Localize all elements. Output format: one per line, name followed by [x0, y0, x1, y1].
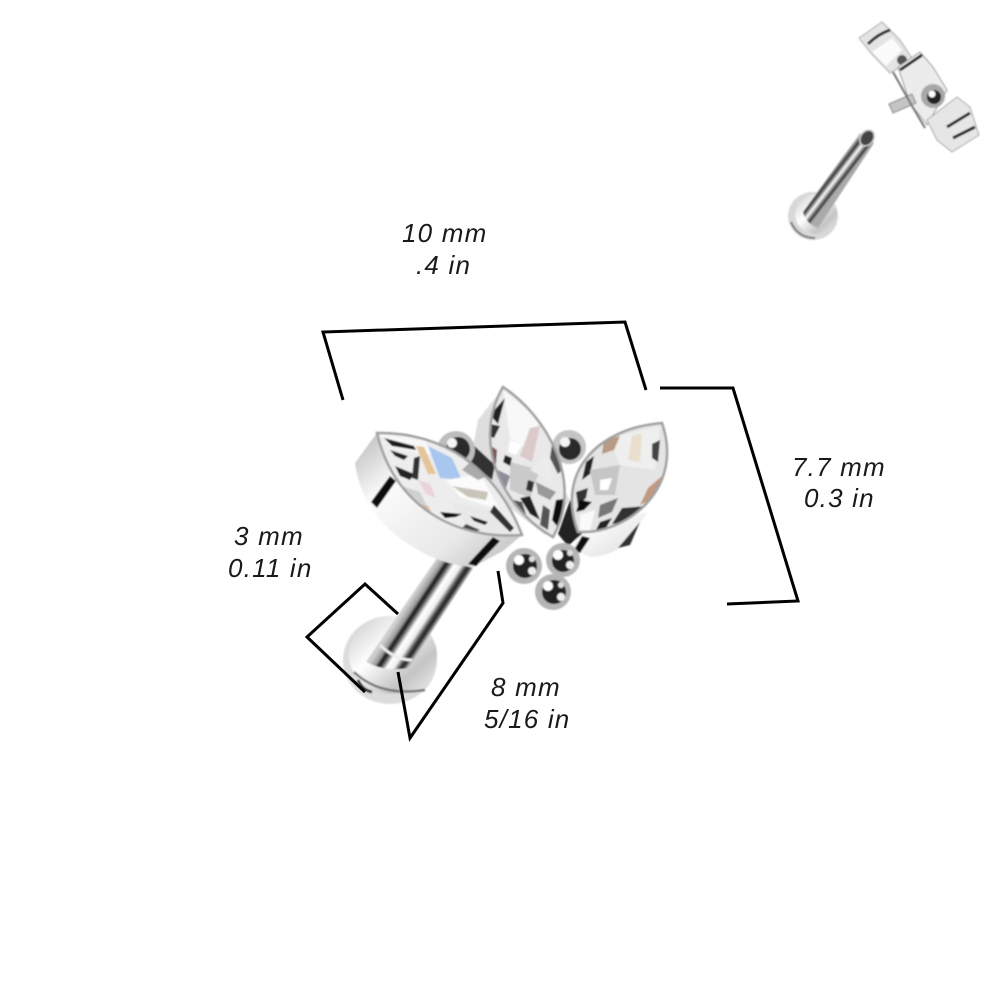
inset: threaded pin — [889, 94, 916, 113]
setting body: left petal — [355, 433, 522, 567]
setting body: middle petal back — [472, 388, 570, 535]
label: 5/16 in: 5/16 in — [484, 704, 570, 734]
inset: flat back disc — [788, 192, 838, 240]
label: 3 mm: 3 mm — [234, 521, 304, 551]
dimension bracket: 10 mm width — [323, 322, 646, 400]
gem: middle marquise — [488, 387, 570, 537]
gem: left marquise — [377, 433, 522, 536]
back beads — [437, 430, 586, 469]
flat back disc — [343, 616, 437, 704]
dark gap behind gems — [558, 500, 582, 546]
inset: small bead — [921, 84, 945, 108]
inset: hollow post — [803, 133, 874, 228]
label: 8 mm: 8 mm — [491, 672, 561, 702]
dimension bracket: 8 mm post length — [398, 571, 503, 738]
label: 0.11 in: 0.11 in — [228, 553, 313, 583]
product photo: main lotus jewel on labret post — [343, 387, 667, 704]
inset: middle lobe — [898, 52, 947, 125]
label: 7.7 mm: 7.7 mm — [792, 452, 886, 482]
label: 10 mm: 10 mm — [402, 218, 487, 248]
inset: jewel seen from behind — [859, 22, 979, 152]
setting body: right petal — [572, 512, 648, 557]
dark setting shadow — [468, 440, 495, 480]
dimension bracket: 3 mm disc — [307, 584, 398, 692]
label: 0.3 in: 0.3 in — [804, 483, 875, 513]
dimension bracket: 7.7 mm height — [660, 388, 798, 604]
inset: post opening — [857, 127, 877, 149]
inset: disc edge — [893, 72, 925, 128]
bead cluster — [506, 543, 580, 610]
gem: right marquise — [572, 423, 667, 532]
inset: right lobe — [927, 97, 979, 152]
threaded post — [366, 558, 473, 669]
inset: left lobe — [859, 22, 913, 73]
inset photo: disassembled piece — [788, 22, 979, 240]
label: .4 in: .4 in — [416, 250, 471, 280]
